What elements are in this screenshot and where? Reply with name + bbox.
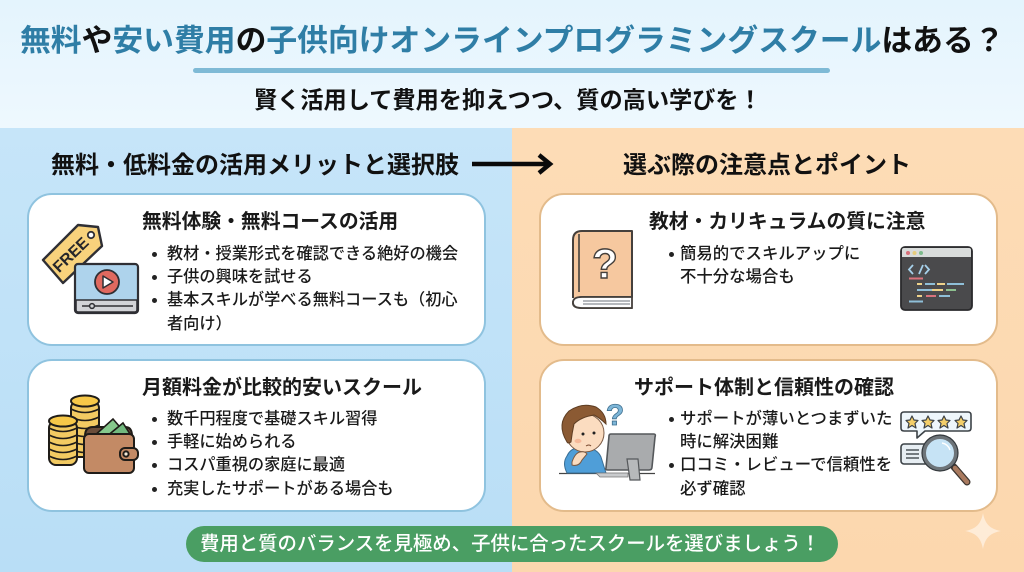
card title: 無料体験・無料コースの活用 (142, 211, 398, 233)
bullet list: 基本スキルが学べる無料コースも（初心 (167, 291, 458, 309)
title: 無料や安い費用の子供向けオンラインプログラミングスクールはある？ (20, 23, 1005, 58)
panel: low monthly fee card (27, 359, 486, 512)
icon: puzzled child at computer: ? (606, 399, 624, 432)
bullet list: 者向け） (167, 315, 232, 333)
header background (0, 0, 1024, 128)
bullet list: 手軽に始められる (167, 433, 296, 451)
bullet list: 不十分な場合も (680, 268, 795, 286)
panel: right background (512, 128, 1024, 572)
heading: left column: 無料・低料金の活用メリットと選択肢 (51, 152, 459, 179)
panel: free trial card (27, 193, 486, 346)
bullet list: 充実したサポートがある場合も (167, 480, 394, 498)
bullet list: 時に解決困難 (680, 433, 778, 451)
heading: right column: 選ぶ際の注意点とポイント (623, 152, 911, 179)
card title: 教材・カリキュラムの質に注意 (649, 211, 925, 233)
bullet list: 必ず確認 (680, 480, 746, 498)
panel: support and trust card (539, 359, 998, 512)
footer message pill (186, 526, 838, 562)
bullet list: 簡易的でスキルアップに (680, 245, 860, 263)
panel: left background (0, 128, 512, 572)
bullet list: 子供の興味を試せる (167, 268, 313, 286)
bullet list: 教材・授業形式を確認できる絶好の機会 (167, 245, 458, 263)
card title: 月額料金が比較的安いスクール (142, 377, 422, 399)
bullet list (669, 410, 892, 498)
arrow between columns (472, 153, 554, 175)
bullet list: サポートが薄いとつまずいた (680, 410, 892, 428)
icon: free tag and video player: FREE (50, 234, 93, 276)
bullet list: 口コミ・レビューで信頼性を (680, 456, 892, 474)
title underline (193, 68, 830, 73)
bullet list: コスパ重視の家庭に最適 (167, 456, 345, 474)
card title: サポート体制と信頼性の確認 (634, 377, 894, 399)
bullet list (669, 244, 860, 286)
bullet list (152, 244, 458, 333)
bullet list: 数千円程度で基礎スキル習得 (167, 410, 377, 428)
icon: book with question mark: ? (592, 240, 618, 287)
subtitle: 賢く活用して費用を抑えつつ、質の高い学びを！ (254, 87, 762, 113)
bullet list (152, 410, 394, 498)
footer text: 費用と質のバランスを見極め、子供に合ったスクールを選びましょう！ (200, 533, 820, 555)
panel: curriculum quality card (539, 193, 998, 346)
icon: sparkle (966, 514, 1000, 548)
